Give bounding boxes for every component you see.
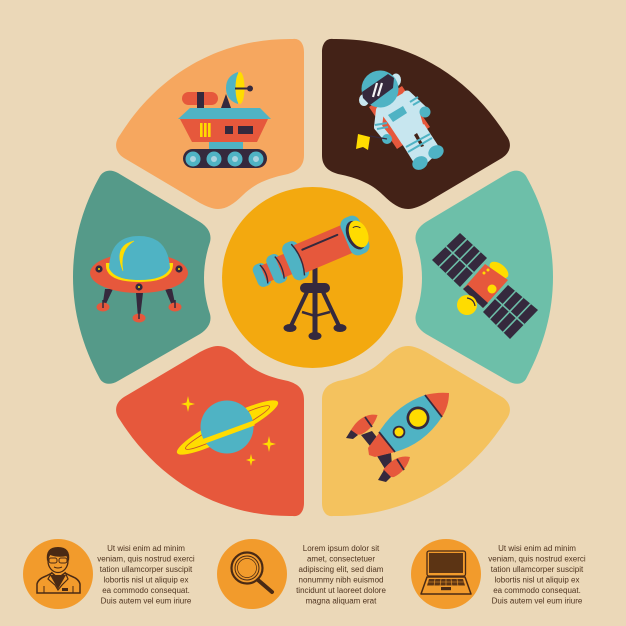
icon: moon rover	[178, 72, 271, 168]
panel: satellite (light teal)	[415, 171, 553, 384]
text block: scientist: Duis autem vel eum iriure	[101, 596, 192, 606]
text block: magnifying glass: nonummy nibh euismod	[299, 576, 383, 584]
text block: magnifying glass: tincidunt ut laoreet dolore	[296, 586, 386, 595]
icon: telescope	[248, 212, 375, 340]
icon: ufo	[90, 236, 188, 322]
text block: magnifying glass: magna aliquam erat	[306, 596, 377, 606]
text block: scientist: ea commodo consequat.	[102, 586, 190, 595]
text block: scientist: tation ullamcorper suscipit	[100, 565, 193, 574]
text block: scientist: lobortis nisl ut aliquip ex	[104, 576, 188, 584]
text block: laptop: veniam, quis nostrud exerci	[488, 554, 586, 564]
icon: scientist	[23, 539, 93, 609]
text block: laptop: Ut wisi enim ad minim	[498, 544, 576, 553]
icon: astronaut	[356, 70, 446, 173]
text block: laptop: tation ullamcorper suscipit	[491, 565, 584, 574]
icon: magnifying glass	[217, 539, 287, 609]
panel: planet (red)	[116, 346, 304, 516]
text block: scientist: veniam, quis nostrud exerci	[97, 554, 195, 564]
panel: ufo (dark teal)	[73, 171, 211, 384]
text block: magnifying glass: adipiscing elit, sed diam	[299, 565, 384, 574]
icon: laptop	[411, 539, 481, 609]
text block: laptop: ea commodo consequat.	[493, 586, 581, 595]
panel: astronaut (brown)	[322, 39, 510, 209]
icon: rocket	[346, 393, 449, 482]
text block: scientist: Ut wisi enim ad minim	[107, 544, 185, 553]
text block: laptop: Duis autem vel eum iriure	[492, 596, 583, 606]
text block: magnifying glass: Lorem ipsum dolor sit	[303, 544, 380, 553]
icon: saturn	[172, 393, 283, 466]
panel: rover (orange)	[116, 39, 304, 209]
icon: satellite	[432, 233, 538, 339]
text block: magnifying glass: amet, consectetuer	[307, 554, 375, 564]
panel: rocket (yellow)	[322, 346, 510, 516]
panel: telescope centre circle	[222, 187, 403, 368]
text block: laptop: lobortis nisl ut aliquip ex	[495, 576, 579, 584]
